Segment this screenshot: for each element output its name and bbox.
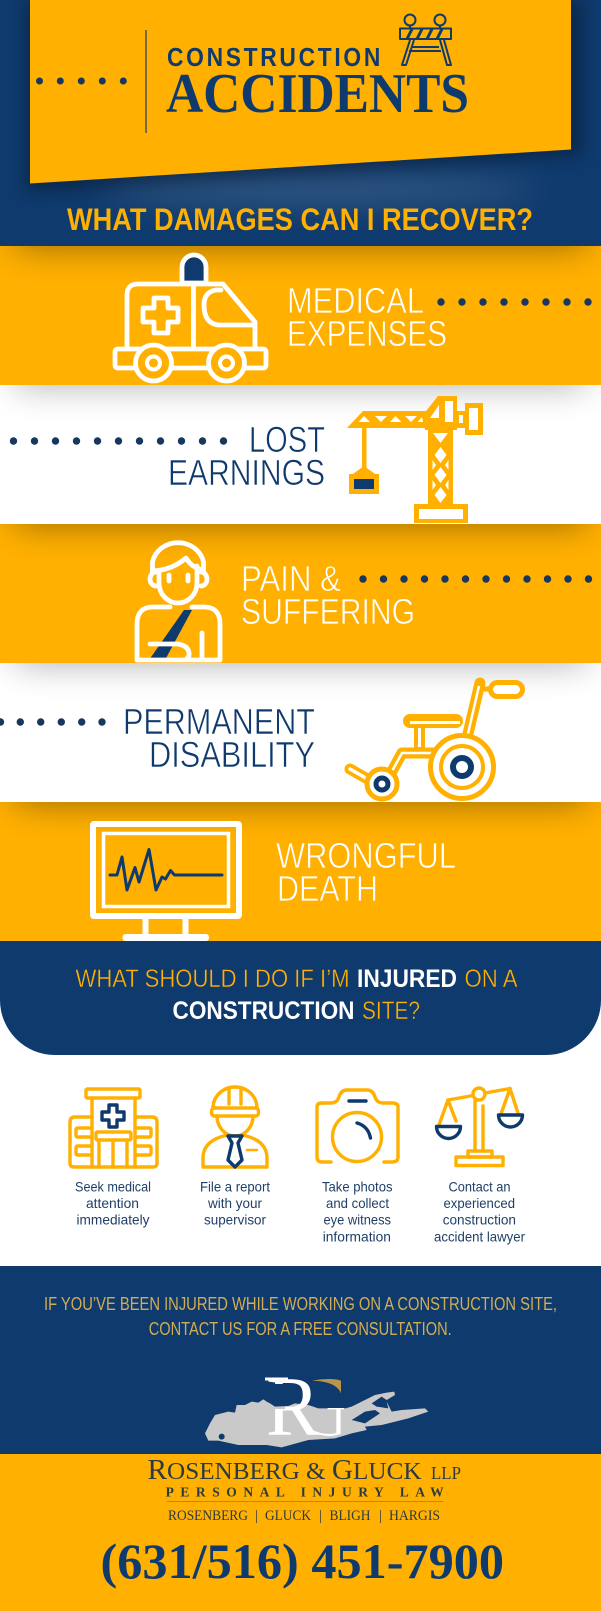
partner names: |	[379, 1508, 382, 1524]
panel: firm footer	[0, 1454, 601, 1611]
panel: permanent disability	[0, 663, 600, 802]
call to action text	[44, 1294, 557, 1339]
banner divider	[145, 30, 147, 133]
caption: construction	[443, 1212, 516, 1228]
caption	[200, 1178, 270, 1228]
icon: injured person with sling	[137, 543, 220, 660]
label: wrongful death: WRONGFUL	[276, 835, 456, 876]
caption: Take photos	[322, 1178, 392, 1194]
step: file a report	[200, 1087, 270, 1228]
panel: pain and suffering	[0, 524, 601, 663]
logo: Long Island map with monogram	[205, 1378, 428, 1448]
title: construction: CONSTRUCTION	[167, 44, 383, 72]
panel: medical expenses	[0, 246, 601, 385]
firm name: LLP	[431, 1463, 461, 1483]
dots	[359, 575, 592, 583]
label: lost earnings	[168, 419, 325, 493]
heading line 2: CONSTRUCTION	[172, 997, 354, 1025]
call to action text: CONTACT US FOR A FREE CONSULTATION.	[149, 1319, 452, 1339]
caption	[434, 1178, 525, 1244]
icon: scales of justice	[436, 1088, 522, 1166]
caption: File a report	[200, 1178, 270, 1194]
label: medical expenses	[287, 280, 447, 354]
icon: worker	[203, 1087, 267, 1167]
step: contact a lawyer	[434, 1088, 525, 1244]
panel: lost earnings	[2, 385, 600, 523]
partner names: ROSENBERG	[168, 1508, 248, 1524]
icon: ambulance	[115, 255, 266, 381]
caption	[322, 1178, 392, 1244]
partner names: |	[255, 1508, 258, 1524]
partner names: |	[319, 1508, 322, 1524]
firm name: ROSENBERG & GLUCK	[148, 1455, 422, 1486]
icon: hospital	[70, 1089, 157, 1167]
panel: steps	[0, 1055, 601, 1266]
label: pain and suffering	[241, 558, 415, 632]
dots	[437, 298, 592, 306]
caption: Contact an	[448, 1178, 510, 1194]
label: permanent disability	[123, 701, 315, 775]
label: permanent disability: PERMANENT	[123, 701, 315, 742]
heading line 1: ON A	[464, 965, 518, 993]
icon: heart monitor	[93, 824, 239, 941]
caption: and collect	[326, 1195, 389, 1211]
section header: what should I do	[0, 941, 601, 1055]
banner dots	[36, 78, 127, 84]
caption: Seek medical	[75, 1178, 151, 1194]
label: medical expenses: EXPENSES	[287, 313, 447, 354]
label: permanent disability: DISABILITY	[149, 734, 315, 775]
icon: camera	[317, 1090, 398, 1162]
header banner	[30, 0, 571, 184]
panel: wrongful death	[0, 802, 601, 941]
partner names: GLUCK	[265, 1508, 311, 1524]
label: wrongful death: DEATH	[277, 868, 378, 909]
banner glow	[26, 0, 582, 204]
panel: call to action	[0, 1266, 601, 1454]
partner names: HARGIS	[389, 1508, 440, 1524]
step: take photos	[317, 1090, 398, 1244]
header background	[0, 0, 601, 246]
caption: eye witness	[324, 1212, 391, 1228]
label: wrongful death	[276, 835, 456, 909]
title: accidents: ACCIDENTS	[166, 63, 469, 125]
caption: experienced	[444, 1195, 515, 1211]
label: pain and suffering: SUFFERING	[241, 591, 415, 632]
caption: immediately	[76, 1212, 150, 1228]
label: lost earnings: LOST	[249, 419, 325, 460]
icon: tower crane	[347, 396, 483, 523]
caption: supervisor	[204, 1212, 266, 1228]
heading line 1: INJURED	[357, 965, 457, 993]
heading: what damages: WHAT DAMAGES CAN I RECOVER?	[67, 201, 533, 237]
caption: accident lawyer	[434, 1228, 525, 1244]
label: pain and suffering: PAIN &	[241, 558, 341, 599]
icon: road barricade	[400, 14, 451, 65]
caption	[75, 1178, 151, 1228]
dots	[0, 718, 106, 726]
firm tagline: PERSONAL INJURY LAW	[166, 1484, 444, 1500]
phone number: (631/516) 451-7900	[100, 1533, 504, 1589]
dots	[10, 437, 227, 445]
label: medical expenses: MEDICAL	[287, 280, 424, 321]
caption: attention	[86, 1195, 139, 1211]
step: seek medical attention	[70, 1089, 157, 1228]
partner names	[168, 1508, 440, 1524]
heading line 1: WHAT SHOULD I DO IF I’M	[76, 965, 350, 993]
label: lost earnings: EARNINGS	[168, 452, 325, 493]
logo: Long Island map with monogram: R	[266, 1360, 320, 1454]
heading line 2: SITE?	[362, 997, 420, 1025]
icon: wheelchair	[350, 682, 522, 799]
caption: with your	[207, 1195, 262, 1211]
partner names: BLIGH	[330, 1508, 371, 1524]
caption: information	[323, 1228, 391, 1244]
